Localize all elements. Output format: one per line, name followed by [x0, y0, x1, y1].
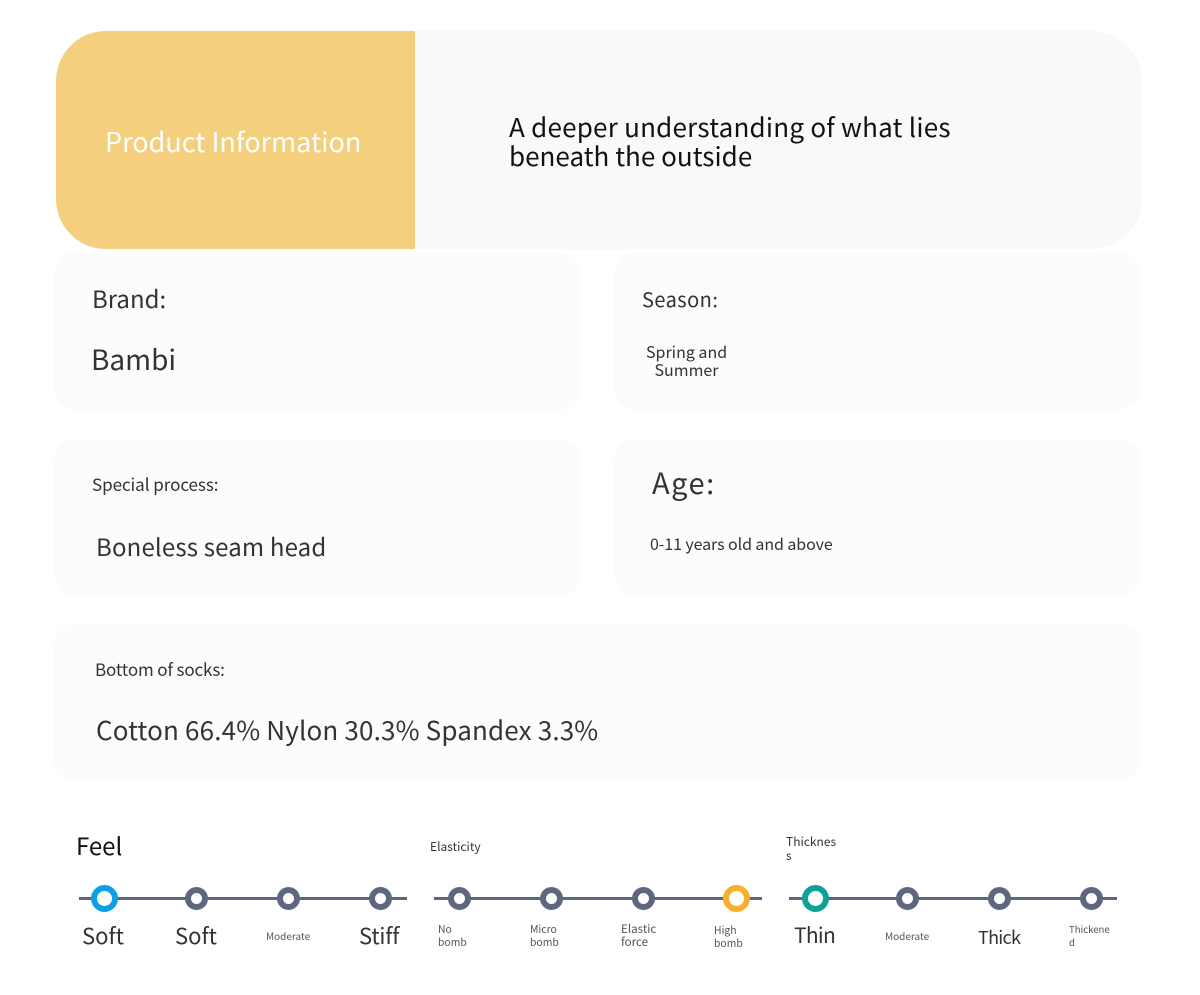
subtitle: beneath the outside — [509, 137, 752, 174]
feel option soft 2: Soft — [175, 919, 217, 951]
thickness marker thickened — [1080, 887, 1103, 910]
elasticity option high bomb — [714, 922, 743, 950]
bottom of socks label: Bottom of socks: — [95, 656, 225, 681]
thickness option thickened: Thickene — [1069, 922, 1110, 936]
elasticity option micro bomb: bomb — [530, 934, 559, 949]
feel marker soft, selected — [91, 885, 118, 912]
elasticity option high bomb: High — [714, 922, 737, 937]
thickness option thick: Thick — [978, 924, 1020, 950]
season label: Season: — [642, 284, 718, 313]
elasticity option micro bomb — [530, 921, 559, 949]
thickness heading: s — [786, 847, 792, 864]
header banner — [56, 31, 951, 249]
header yellow title block — [56, 31, 415, 249]
season value: Spring and — [646, 339, 727, 363]
panel: brand — [54, 253, 581, 410]
panel: special process — [54, 439, 581, 596]
elasticity heading: Elasticity — [430, 838, 481, 855]
feel heading: Feel — [76, 827, 122, 862]
scale: feel — [76, 827, 407, 951]
thickness option thin: Thin — [794, 920, 835, 950]
season value — [646, 339, 727, 381]
panel: bottom of socks — [54, 624, 1140, 781]
age value: 0-11 years old and above — [650, 531, 833, 555]
panel: age — [614, 439, 1140, 596]
elasticity option no bomb: No — [438, 921, 452, 936]
elasticity option high bomb: bomb — [714, 935, 743, 950]
scale: elasticity — [430, 838, 762, 950]
thickness heading: Thicknes — [786, 833, 836, 850]
brand value: Bambi — [91, 339, 176, 379]
elasticity option no bomb: bomb — [438, 934, 467, 949]
feel option stiff: Stiff — [359, 919, 399, 951]
feel marker moderate — [277, 887, 300, 910]
elasticity option elastic force: force — [621, 934, 648, 950]
elasticity marker micro bomb — [540, 887, 563, 910]
elasticity marker elastic force — [632, 887, 655, 910]
special process value: Boneless seam head — [96, 528, 326, 563]
season value: Summer — [655, 357, 718, 381]
subtitle: A deeper understanding of what lies — [509, 108, 951, 145]
thickness heading — [786, 833, 836, 864]
thickness marker thin, selected — [802, 885, 829, 912]
feel option soft: Soft — [82, 919, 124, 951]
brand label: Brand: — [92, 280, 166, 315]
thickness option moderate: Moderate — [885, 928, 929, 943]
panel: season — [614, 253, 1140, 410]
composition value: Cotton 66.4% Nylon 30.3% Spandex 3.3% — [96, 711, 598, 748]
thickness marker moderate — [896, 887, 919, 910]
feel marker soft — [185, 887, 208, 910]
elasticity option no bomb — [438, 921, 467, 949]
special process label: Special process: — [92, 471, 218, 496]
thickness option thickened — [1069, 922, 1110, 949]
feel marker stiff — [369, 887, 392, 910]
elasticity option elastic force — [621, 921, 656, 950]
feel option moderate: Moderate — [266, 928, 310, 943]
elasticity option micro bomb: Micro — [530, 921, 557, 936]
elasticity marker high bomb, selected — [723, 885, 750, 912]
title: Product Information — [105, 121, 361, 160]
header right panel — [56, 31, 1142, 249]
thickness option thickened: d — [1069, 935, 1075, 949]
age label: Age: — [652, 461, 716, 503]
elasticity option elastic force: Elastic — [621, 921, 656, 937]
thickness marker thick — [988, 887, 1011, 910]
subtitle — [509, 108, 951, 174]
scale: thickness — [786, 833, 1117, 950]
elasticity marker no bomb — [448, 887, 471, 910]
